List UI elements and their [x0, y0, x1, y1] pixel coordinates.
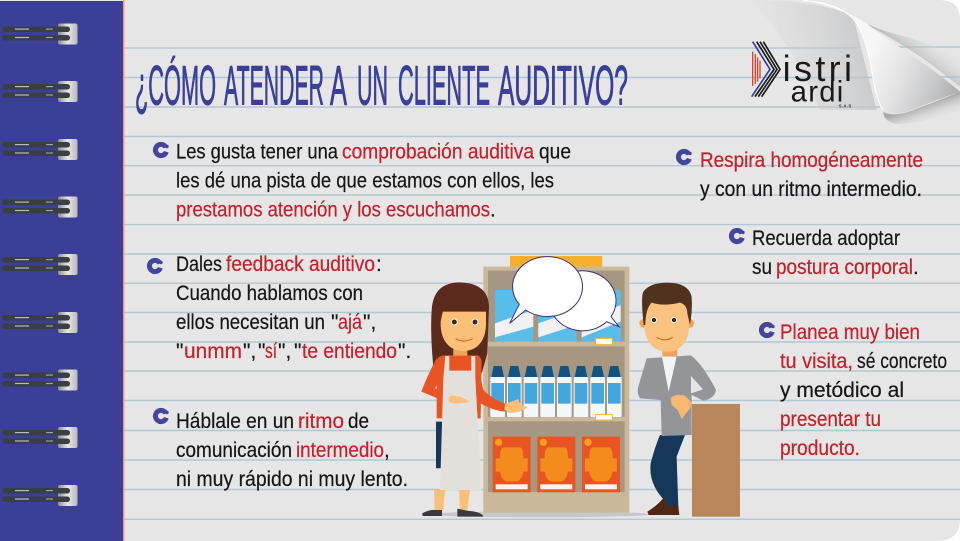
title: A	[330, 54, 347, 116]
margin line	[123, 0, 124, 541]
logo: Distriardi: ardi	[791, 75, 843, 108]
text block: feedback auditivo: ",	[243, 340, 256, 363]
logo: Distriardi	[752, 42, 852, 108]
text block: feedback auditivo: "	[294, 340, 301, 363]
speech bubble: back	[549, 271, 619, 331]
title: CLIENTE	[398, 54, 490, 116]
curl shadow	[883, 92, 960, 124]
spiral binding rings	[2, 24, 78, 506]
ruled notebook lines	[124, 47, 960, 519]
text block: feedback auditivo	[148, 253, 411, 363]
text block: feedback auditivo: "	[331, 311, 338, 334]
text block: respira: y con un ritmo intermedio.	[700, 178, 922, 201]
text block: feedback auditivo: Dales	[176, 253, 222, 276]
store shelf	[483, 256, 629, 513]
text block: comprobación auditiva: que	[539, 140, 571, 164]
text block: feedback auditivo: sí	[265, 340, 277, 363]
text block: ritmo intermedio: ritmo	[298, 410, 344, 433]
text block: comprobación auditiva: .	[490, 198, 496, 222]
illustration: store scene	[421, 256, 740, 517]
text block: postura corporal: su	[752, 256, 772, 279]
text block: feedback auditivo: ellos necesitan un	[176, 311, 325, 334]
text block: ritmo intermedio: comunicación	[176, 439, 292, 462]
text block: planea tu visita: producto.	[780, 437, 860, 460]
text block: postura corporal: postura corporal	[776, 256, 913, 279]
title: ATENDER	[224, 54, 324, 116]
counter box	[692, 404, 740, 517]
text block: feedback auditivo: "	[176, 340, 183, 363]
text block: comprobación auditiva	[154, 140, 571, 222]
text block: feedback auditivo: "	[258, 340, 265, 363]
text block: respira: Respira homogéneamente	[700, 149, 923, 172]
logo wordmark: istri	[783, 48, 852, 89]
text block: feedback auditivo: unmm	[184, 340, 242, 363]
text block: feedback auditivo: feedback auditivo	[226, 253, 375, 276]
logo mark	[752, 42, 780, 97]
man customer	[638, 283, 716, 515]
text block: comprobación auditiva: comprobación auditiva	[342, 140, 534, 164]
text block: feedback auditivo: ".	[398, 340, 411, 363]
title: ¿CÓMO	[135, 54, 216, 116]
woman shopkeeper	[421, 282, 527, 517]
text block: ritmo intermedio: Háblale en un	[176, 410, 294, 433]
text block: feedback auditivo: ajá	[338, 311, 362, 334]
title	[135, 54, 628, 116]
text block: comprobación auditiva: les dé una pista de que estamos con ellos, les	[176, 170, 554, 192]
text block: ritmo intermedio	[154, 409, 408, 491]
text block: planea tu visita: Planea muy bien	[780, 321, 920, 344]
text block: feedback auditivo: ",	[363, 311, 376, 334]
text: AUDITIVO?	[498, 54, 628, 116]
text block: planea tu visita: y metódico al	[780, 379, 904, 402]
bottles	[490, 366, 622, 417]
text block: comprobación auditiva: Les gusta tener una	[176, 140, 338, 164]
floor shadow	[430, 511, 650, 517]
text block: postura corporal	[730, 227, 919, 279]
text block: postura corporal: Recuerda adoptar	[752, 227, 900, 250]
text block: postura corporal: .	[913, 256, 919, 279]
text block: ritmo intermedio: de	[348, 410, 369, 433]
text block: feedback auditivo: te entiendo	[302, 340, 397, 363]
text block: ritmo intermedio: intermedio	[296, 439, 384, 462]
text block: comprobación auditiva: prestamos atención y los escuchamos	[176, 198, 490, 222]
top shelf boxes	[495, 290, 533, 342]
title: UN	[357, 54, 388, 116]
text block: planea tu visita	[760, 321, 947, 460]
text block: feedback auditivo: :	[376, 253, 382, 276]
page curl	[750, 0, 960, 124]
text block: feedback auditivo: ",	[278, 340, 291, 363]
orange boxes	[493, 437, 620, 492]
text block: planea tu visita: tu visita,	[780, 350, 853, 373]
text block: planea tu visita: presentar tu	[780, 408, 881, 431]
speech bubble: front	[510, 257, 583, 323]
text block: ritmo intermedio: ni muy rápido ni muy lento.	[176, 468, 408, 491]
text block: respira	[677, 149, 923, 201]
notebook cover strip	[0, 1, 123, 541]
text block: feedback auditivo: Cuando hablamos con	[176, 282, 363, 305]
text block: ritmo intermedio: ,	[384, 439, 390, 462]
logo: Distriardi: S.A.S	[839, 103, 851, 108]
